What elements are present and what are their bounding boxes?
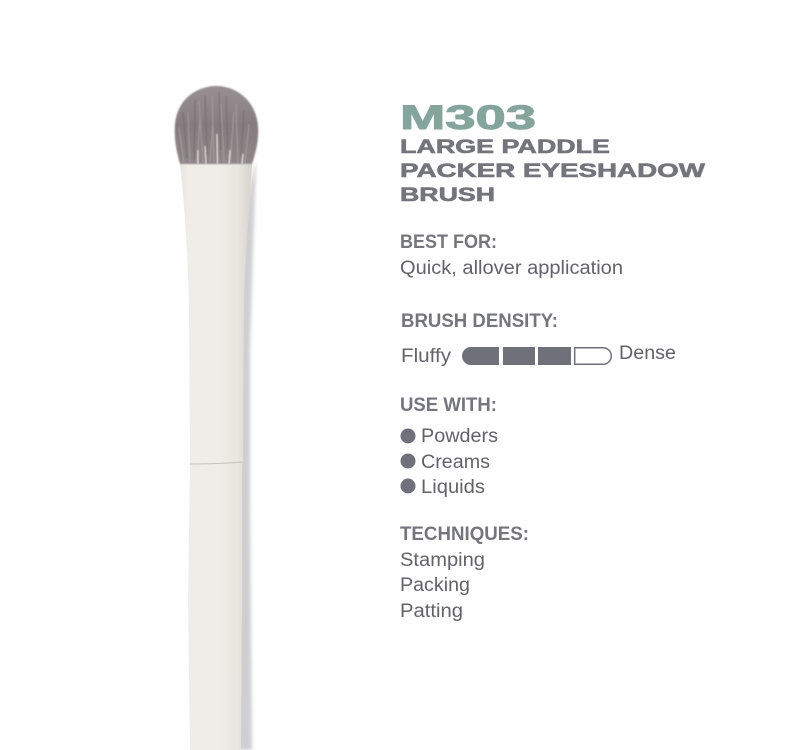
best for <box>400 232 623 279</box>
brush density <box>401 311 676 367</box>
best for: BEST FOR: <box>400 232 497 253</box>
bristles <box>175 86 258 164</box>
techniques: Stamping <box>400 550 485 571</box>
best for: Quick, allover application <box>400 258 623 279</box>
list item: liquids: Liquids <box>421 477 485 498</box>
techniques: TECHNIQUES: <box>400 524 529 545</box>
techniques: Packing <box>400 575 470 596</box>
ferrule joint line <box>190 462 243 464</box>
techniques <box>400 524 529 622</box>
handle shadow <box>236 160 256 750</box>
list item: creams: Creams <box>421 452 490 473</box>
label: dense: Dense <box>619 343 676 364</box>
title <box>400 99 706 206</box>
label: fluffy: Fluffy <box>401 346 452 367</box>
product name <box>400 136 706 206</box>
density scale <box>462 347 611 365</box>
product name: BRUSH <box>400 184 495 206</box>
use with <box>400 395 498 498</box>
brush handle <box>180 164 252 750</box>
density heading: BRUSH DENSITY: <box>401 311 558 332</box>
list item: powders: Powders <box>421 426 498 447</box>
product name: PACKER EYESHADOW <box>400 160 706 182</box>
brush <box>175 86 258 750</box>
techniques: Patting <box>400 601 463 622</box>
product code: M303 <box>400 99 536 137</box>
use with: USE WITH: <box>400 395 497 416</box>
product name: LARGE PADDLE <box>400 136 610 158</box>
